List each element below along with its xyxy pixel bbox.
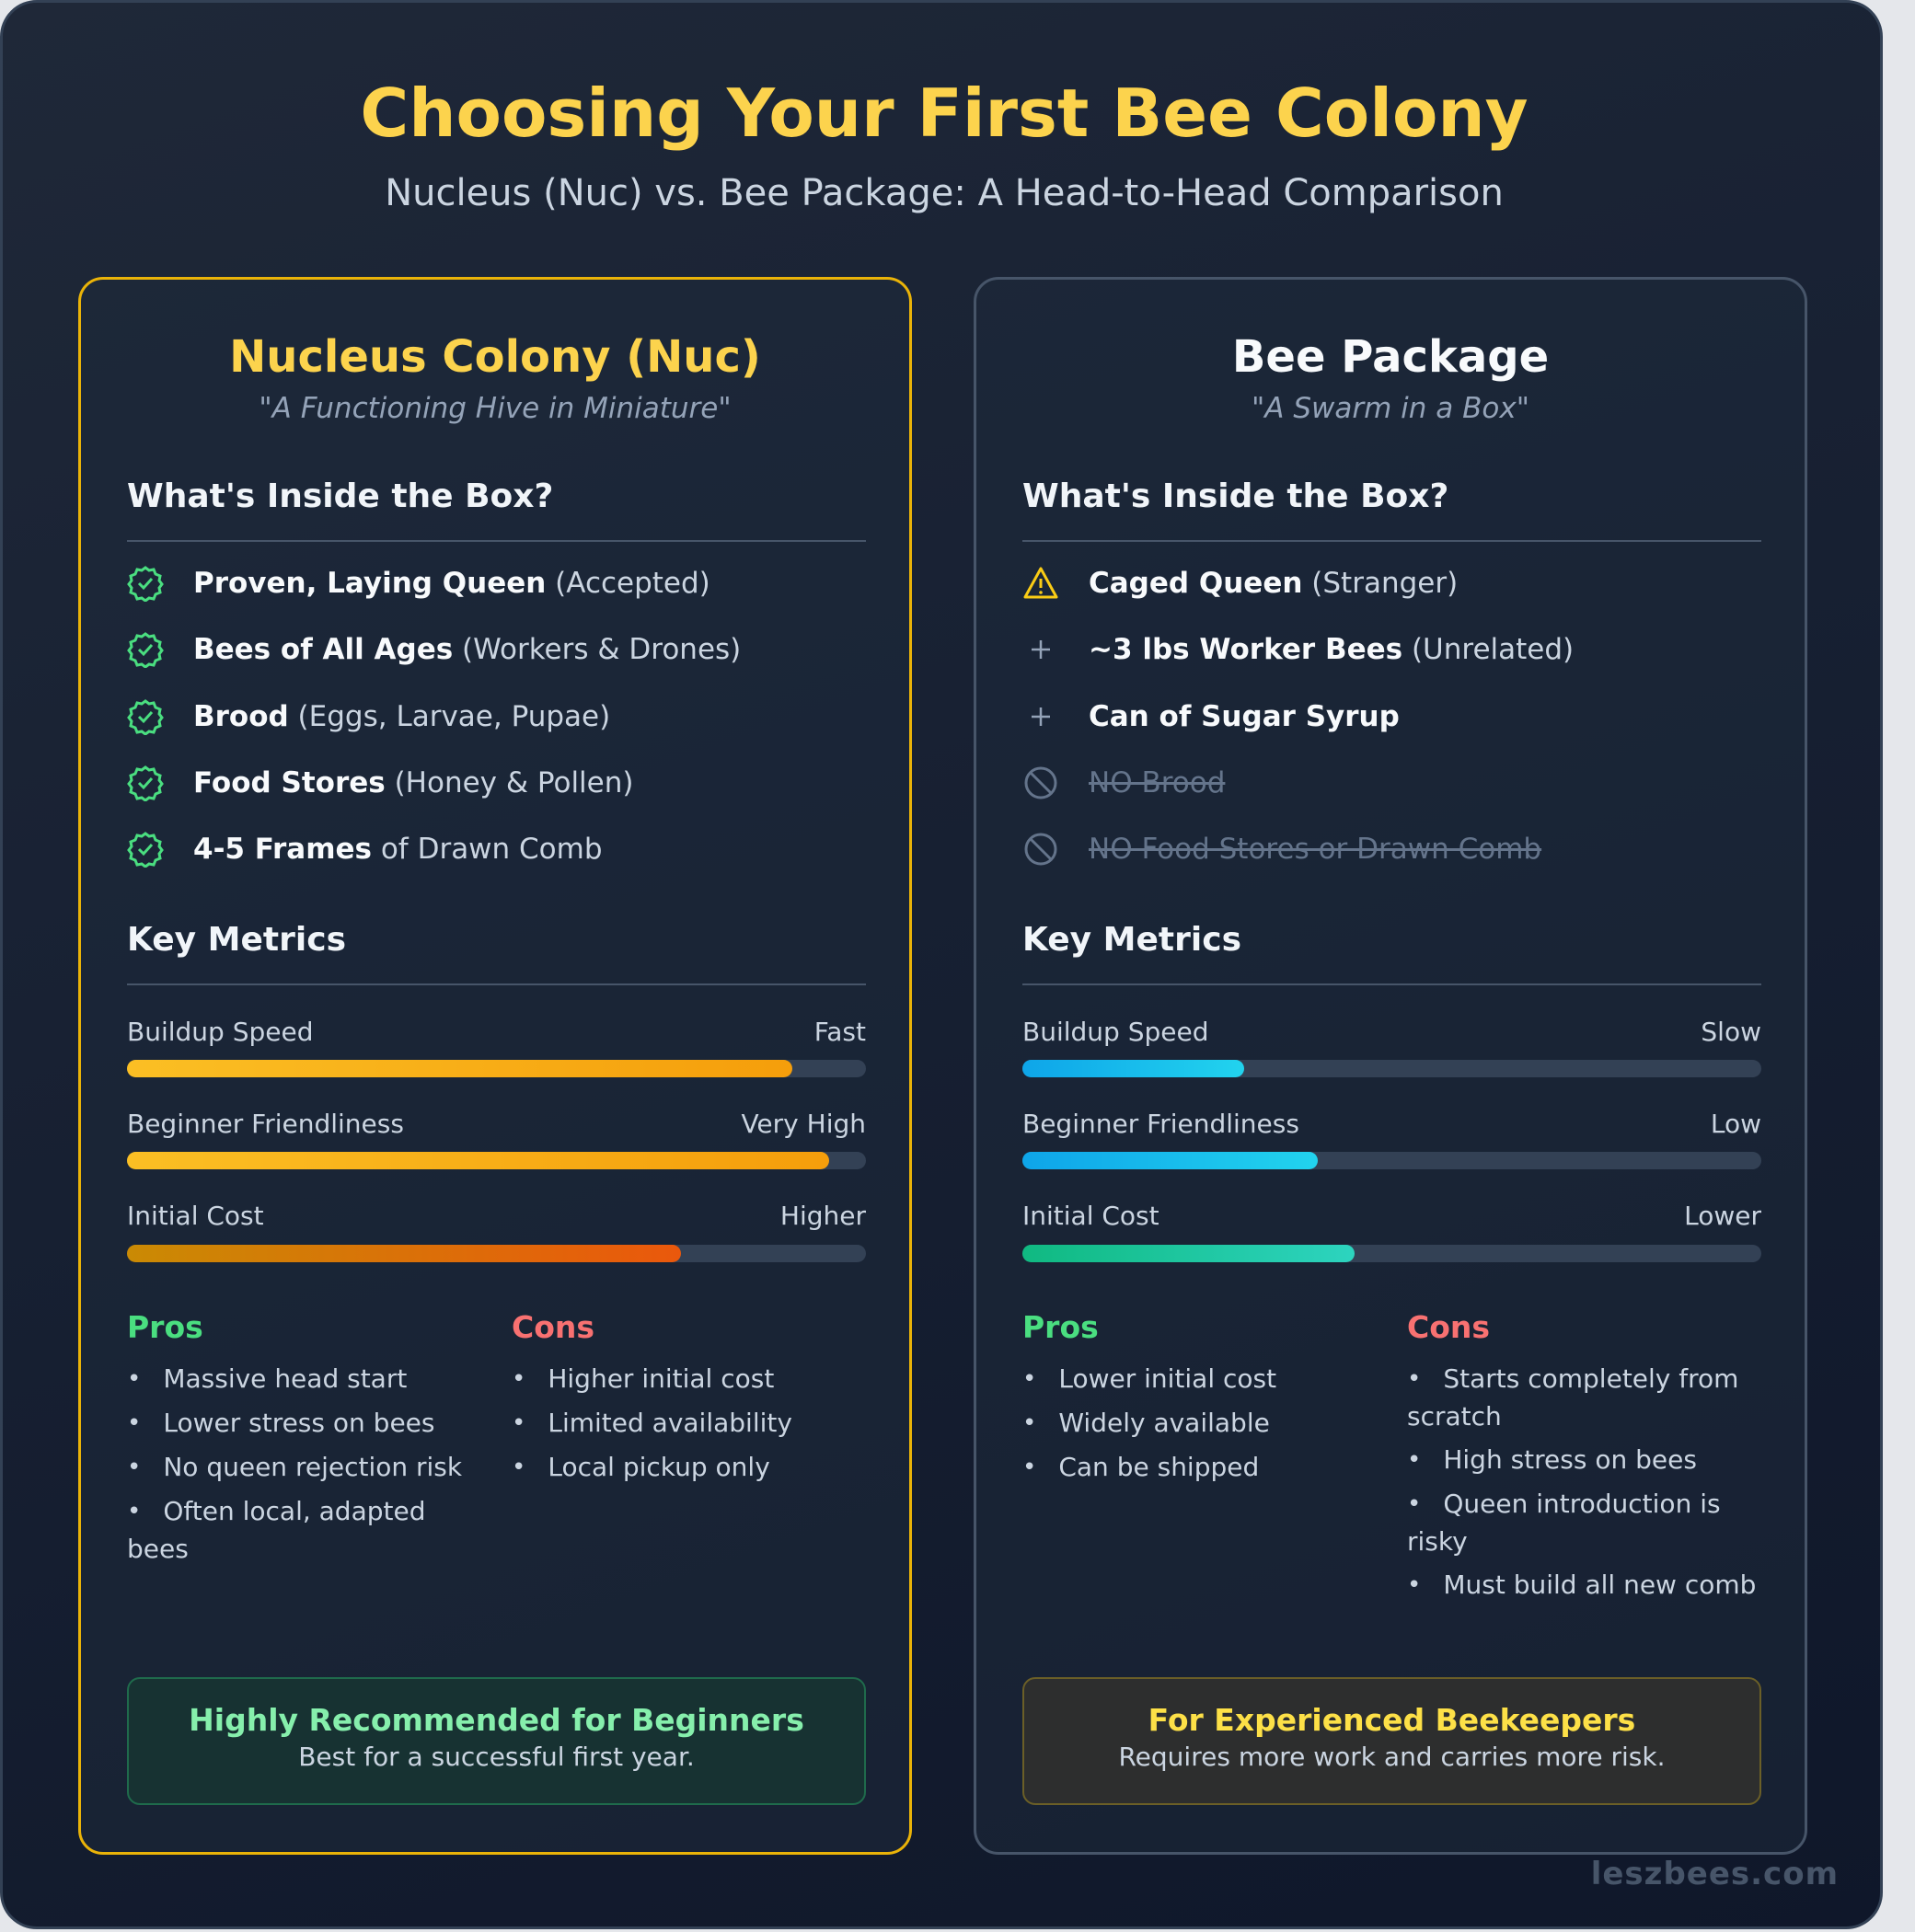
metric: beginner — [1022, 1109, 1761, 1139]
metric: buildup — [1022, 1017, 1761, 1047]
metric: cost: Initial Cost — [1022, 1201, 1159, 1231]
cons: Local pickup only — [548, 1452, 770, 1482]
panel: bee package — [974, 277, 1807, 1855]
cons: Starts completely from scratch — [1407, 1363, 1738, 1432]
cons — [1407, 1309, 1756, 1600]
item: food: Food Stores (Honey & Pollen) — [193, 766, 633, 799]
metric: cost — [1022, 1201, 1761, 1231]
recommendation box: Best for a successful first year. — [298, 1742, 695, 1772]
cons: Must build all new comb — [1443, 1570, 1756, 1600]
panel heading: nuc: Nucleus Colony (Nuc) — [229, 331, 761, 383]
cons: Higher initial cost — [548, 1363, 774, 1394]
heading: what's inside: What's Inside the Box? — [127, 477, 553, 515]
item: syrup: Can of Sugar Syrup — [1089, 700, 1400, 733]
heading: what's inside: What's Inside the Box? — [1022, 477, 1448, 515]
title: Choosing Your First Bee Colony — [360, 75, 1529, 152]
metric: buildup — [127, 1017, 866, 1047]
tagline: "A Swarm in a Box" — [1252, 392, 1529, 425]
subtitle: Nucleus (Nuc) vs. Bee Package: A Head-to-Head Comparison — [385, 172, 1504, 214]
item: no food: NO Food Stores or Drawn Comb — [1089, 833, 1541, 866]
heading: key metrics: Key Metrics — [1022, 921, 1241, 959]
pros — [127, 1309, 462, 1564]
item: caged queen: Caged Queen (Stranger) — [1089, 567, 1458, 600]
metric: cost: Initial Cost — [127, 1201, 264, 1231]
item: no brood: NO Brood — [1089, 766, 1225, 799]
panel heading: package: Bee Package — [1232, 331, 1549, 383]
pros: Pros — [1022, 1309, 1099, 1345]
cons: Cons — [1407, 1309, 1490, 1345]
recommendation box: For Experienced Beekeepers — [1148, 1702, 1635, 1738]
pros: Lower initial cost — [1058, 1363, 1276, 1394]
metric: buildup: Slow — [1701, 1017, 1761, 1047]
pros — [1022, 1309, 1276, 1482]
metric: buildup: Buildup Speed — [1022, 1017, 1208, 1047]
metric: beginner: Beginner Friendliness — [1022, 1109, 1299, 1139]
cons — [512, 1309, 792, 1482]
recommendation box: Requires more work and carries more risk. — [1118, 1742, 1666, 1772]
cons: High stress on bees — [1443, 1444, 1697, 1475]
pros: Pros — [127, 1309, 203, 1345]
metric: beginner — [127, 1109, 866, 1139]
metric: cost — [127, 1201, 866, 1231]
panel: nucleus colony — [78, 277, 912, 1855]
metric: cost: Lower — [1684, 1201, 1761, 1231]
item: queen: Proven, Laying Queen (Accepted) — [193, 567, 710, 600]
item: bees: Bees of All Ages (Workers & Drones) — [193, 633, 741, 666]
recommendation box — [127, 1677, 866, 1805]
recommendation box — [1022, 1677, 1761, 1805]
metric: beginner: Beginner Friendliness — [127, 1109, 404, 1139]
cons: Cons — [512, 1309, 594, 1345]
watermark: leszbees.com — [1591, 1856, 1839, 1892]
item: frames: 4-5 Frames of Drawn Comb — [193, 833, 603, 866]
pros: Can be shipped — [1058, 1452, 1259, 1482]
item: no brood — [1025, 766, 1226, 799]
tagline: "A Functioning Hive in Miniature" — [259, 392, 732, 425]
recommendation box: Highly Recommended for Beginners — [189, 1702, 804, 1738]
metric: cost: Higher — [780, 1201, 866, 1231]
metric: beginner: Very High — [741, 1109, 866, 1139]
metric: beginner: Low — [1711, 1109, 1761, 1139]
metric: buildup: Fast — [814, 1017, 866, 1047]
heading: key metrics: Key Metrics — [127, 921, 346, 959]
metric: buildup: Buildup Speed — [127, 1017, 313, 1047]
cons: Limited availability — [548, 1408, 792, 1438]
pros: Widely available — [1058, 1408, 1270, 1438]
pros: Massive head start — [163, 1363, 407, 1394]
item: worker bees: ~3 lbs Worker Bees (Unrelated) — [1089, 633, 1574, 666]
pros: No queen rejection risk — [163, 1452, 462, 1482]
item: brood: Brood (Eggs, Larvae, Pupae) — [193, 700, 610, 733]
pros: Lower stress on bees — [163, 1408, 434, 1438]
cons: Queen introduction is risky — [1407, 1489, 1721, 1557]
pros: Often local, adapted bees — [127, 1496, 425, 1564]
